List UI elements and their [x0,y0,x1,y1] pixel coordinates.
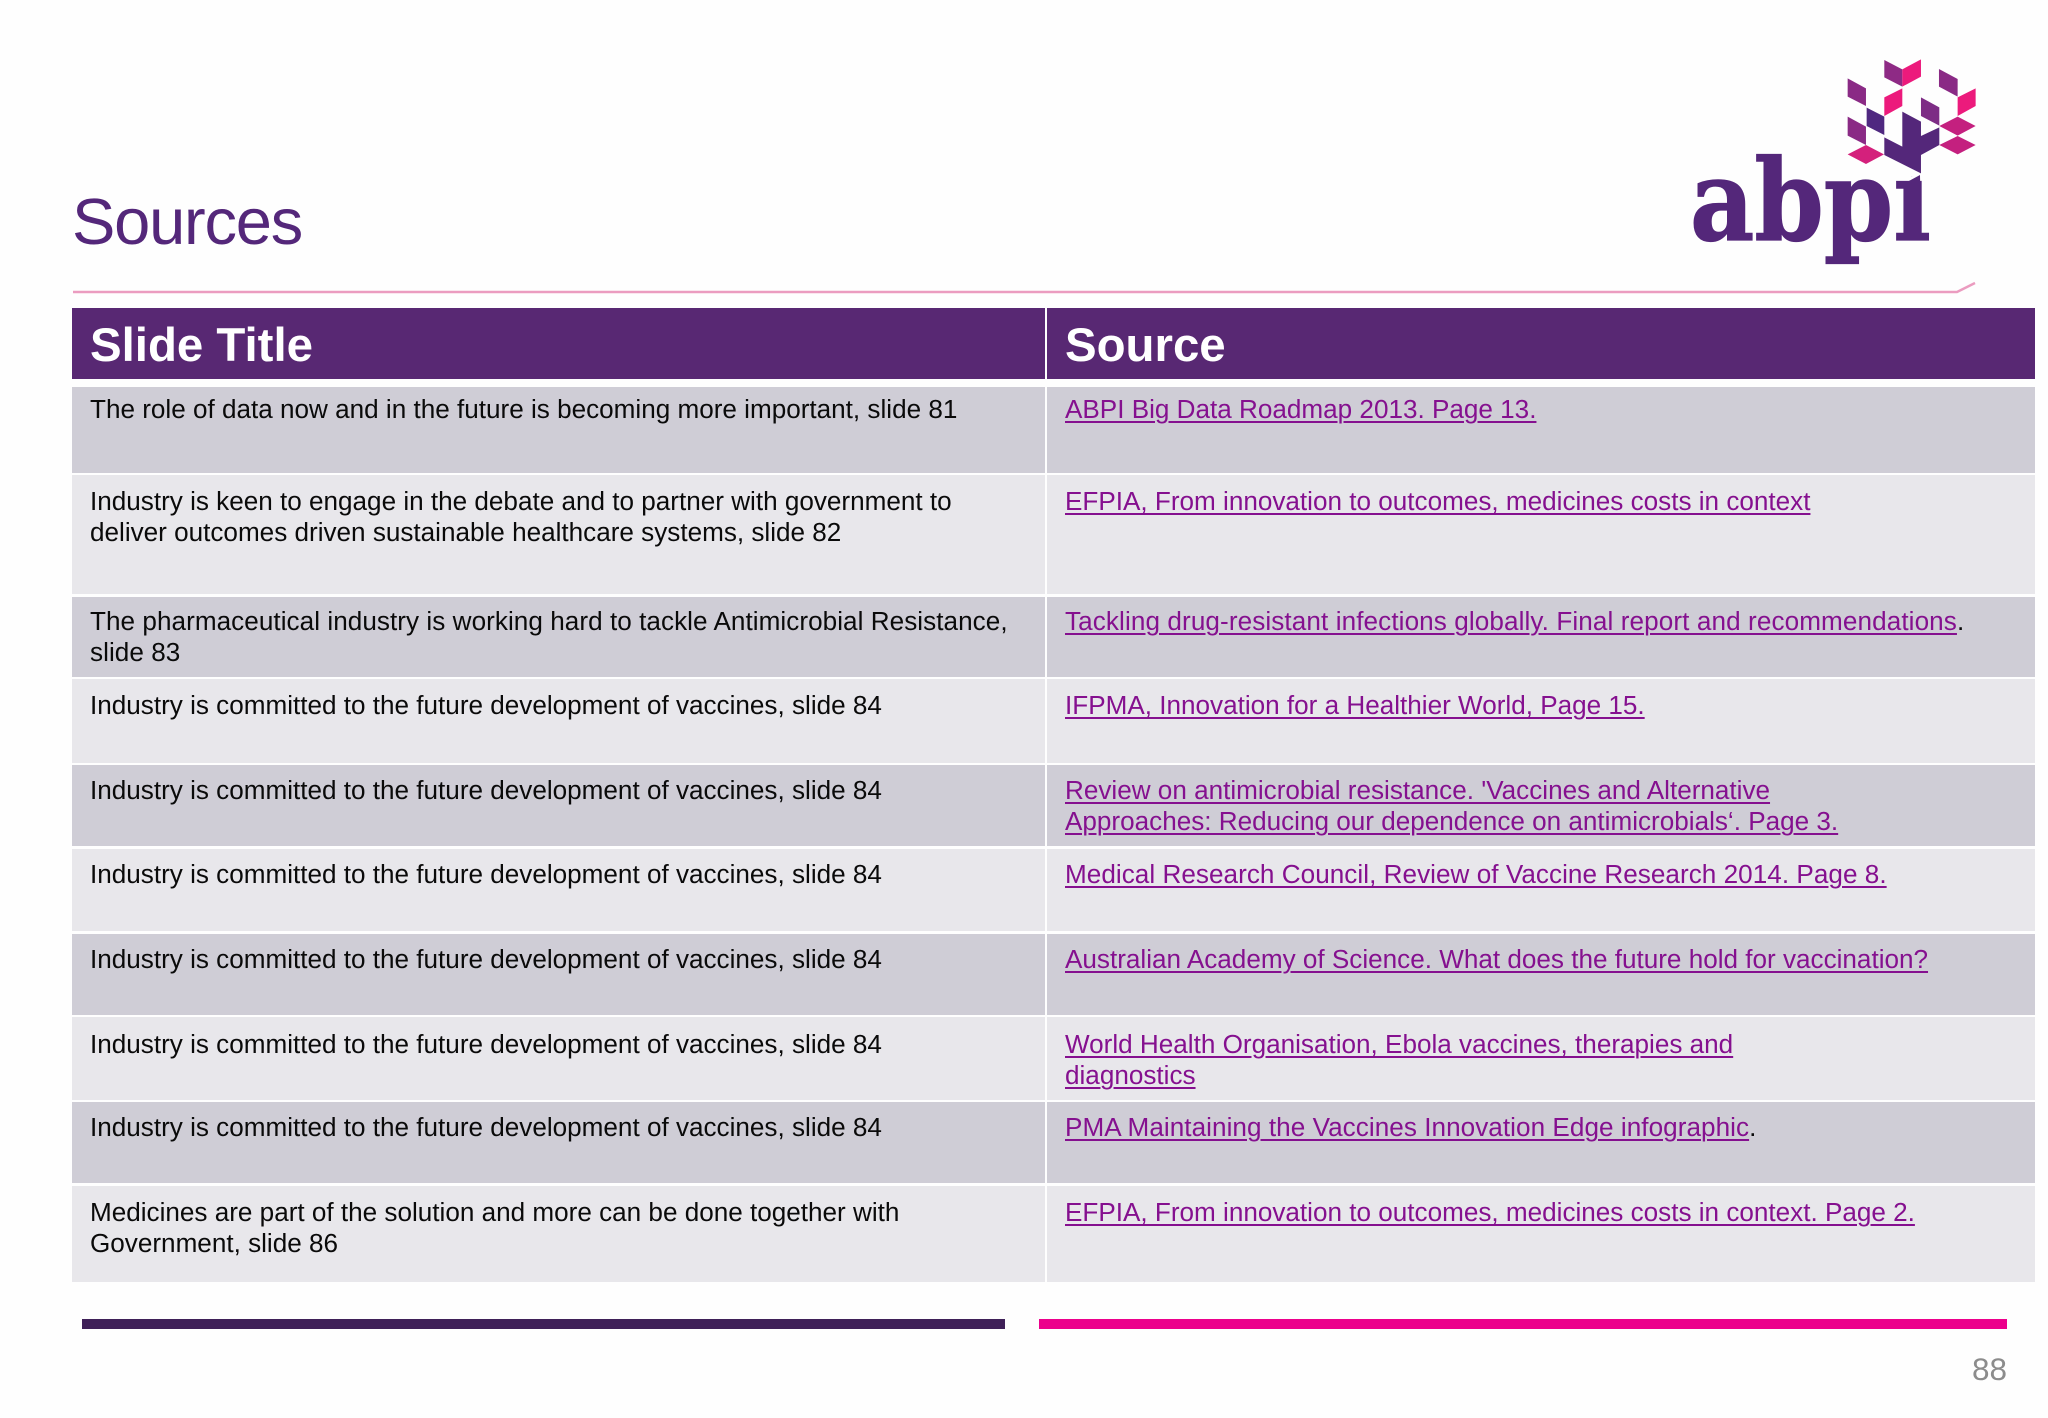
header cell: slide title: Slide Title [90,319,313,372]
table row 10 [72,1186,2035,1282]
table row 3: The pharmaceutical industry is working hard to tackle Antimicrobial Resistance, [90,606,1008,636]
table row 1: The role of data now and in the future is becoming more important, slide 81 [90,394,957,424]
table row 2: EFPIA, From innovation to outcomes, medicines costs in context [1065,486,1810,516]
title: Sources [72,185,302,258]
table row 2: Industry is keen to engage in the debate and to partner with government to [90,486,952,516]
table row 6: Industry is committed to the future development of vaccines, slide 84 [90,859,882,889]
header cell: slide title [72,308,1045,379]
table row 9: PMA Maintaining the Vaccines Innovation Edge infographic. [1065,1112,1756,1142]
table row 3: Tackling drug-resistant infections globally. Final report and recommendations. [1065,606,1964,636]
header cell: source: Source [1065,319,1226,372]
table row 5: Approaches: Reducing our dependence on antimicrobials‘. Page 3. [1065,806,1838,836]
table row 9: Industry is committed to the future development of vaccines, slide 84 [90,1112,882,1142]
table row 3: slide 83 [90,637,180,667]
table row 8: diagnostics [1065,1060,1196,1090]
footer bar: pink [1039,1319,2007,1328]
table row 4 [72,679,2035,763]
table row 7 [72,934,2035,1015]
table header [72,308,2035,379]
table row 3 [72,597,2035,677]
pink header rule [73,282,1976,294]
table row 8 [72,1017,2035,1100]
table row 9 [72,1102,2035,1183]
logo: abpi tree [1690,59,1976,267]
table row 1 [72,387,2035,473]
table row 2: deliver outcomes driven sustainable healthcare systems, slide 82 [90,517,841,547]
table row 5: Review on antimicrobial resistance. 'Vaccines and Alternative [1065,775,1770,805]
footer bar: dark purple [82,1319,1005,1328]
logo: abpi tree: abpi [1690,136,1931,267]
table row 6 [72,849,2035,931]
table row 2 [72,475,2035,594]
table row 7: Industry is committed to the future development of vaccines, slide 84 [90,944,882,974]
page number: 88 [1972,1351,2007,1387]
header cell: source [1047,308,2035,379]
table row 4: IFPMA, Innovation for a Healthier World, Page 15. [1065,690,1645,720]
table row 5 [72,765,2035,846]
table row 6: Medical Research Council, Review of Vaccine Research 2014. Page 8. [1065,859,1887,889]
table row 7: Australian Academy of Science. What does the future hold for vaccination? [1065,944,1928,974]
table row 10: Government, slide 86 [90,1228,338,1258]
table row 8: Industry is committed to the future development of vaccines, slide 84 [90,1029,882,1059]
table row 8: World Health Organisation, Ebola vaccines, therapies and [1065,1029,1733,1059]
table row 5: Industry is committed to the future development of vaccines, slide 84 [90,775,882,805]
table row 1: ABPI Big Data Roadmap 2013. Page 13. [1065,394,1536,424]
table row 10: Medicines are part of the solution and more can be done together with [90,1197,899,1227]
table row 4: Industry is committed to the future development of vaccines, slide 84 [90,690,882,720]
table row 10: EFPIA, From innovation to outcomes, medicines costs in context. Page 2. [1065,1197,1915,1227]
